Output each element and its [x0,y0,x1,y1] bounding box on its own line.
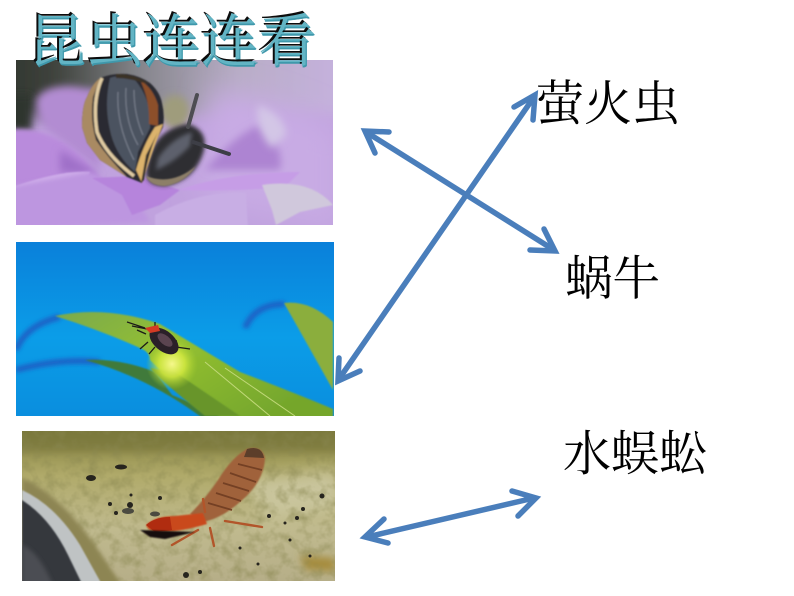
label: water centipede: 水蜈蚣 [563,428,707,481]
title: 昆虫连连看 [28,11,316,74]
title: 昆虫连连看 [26,9,314,72]
specks on rock [86,464,324,578]
label: snail: 蜗牛 [565,254,660,306]
title: 昆虫连连看 [29,12,317,75]
larva [140,448,265,546]
arrow: snail photo to snail label [365,131,555,251]
snail body [146,95,229,186]
firefly [127,322,190,360]
arrow: firefly photo to firefly label [338,95,535,381]
label: firefly: 萤火虫 [536,78,680,131]
photo: snail on purple flower [16,60,333,225]
photo: water centipede larva on rock [22,431,335,581]
photo: firefly on leaf [16,242,334,420]
snail shell [82,74,164,183]
arrow: centipede photo to centipede label [365,491,536,543]
